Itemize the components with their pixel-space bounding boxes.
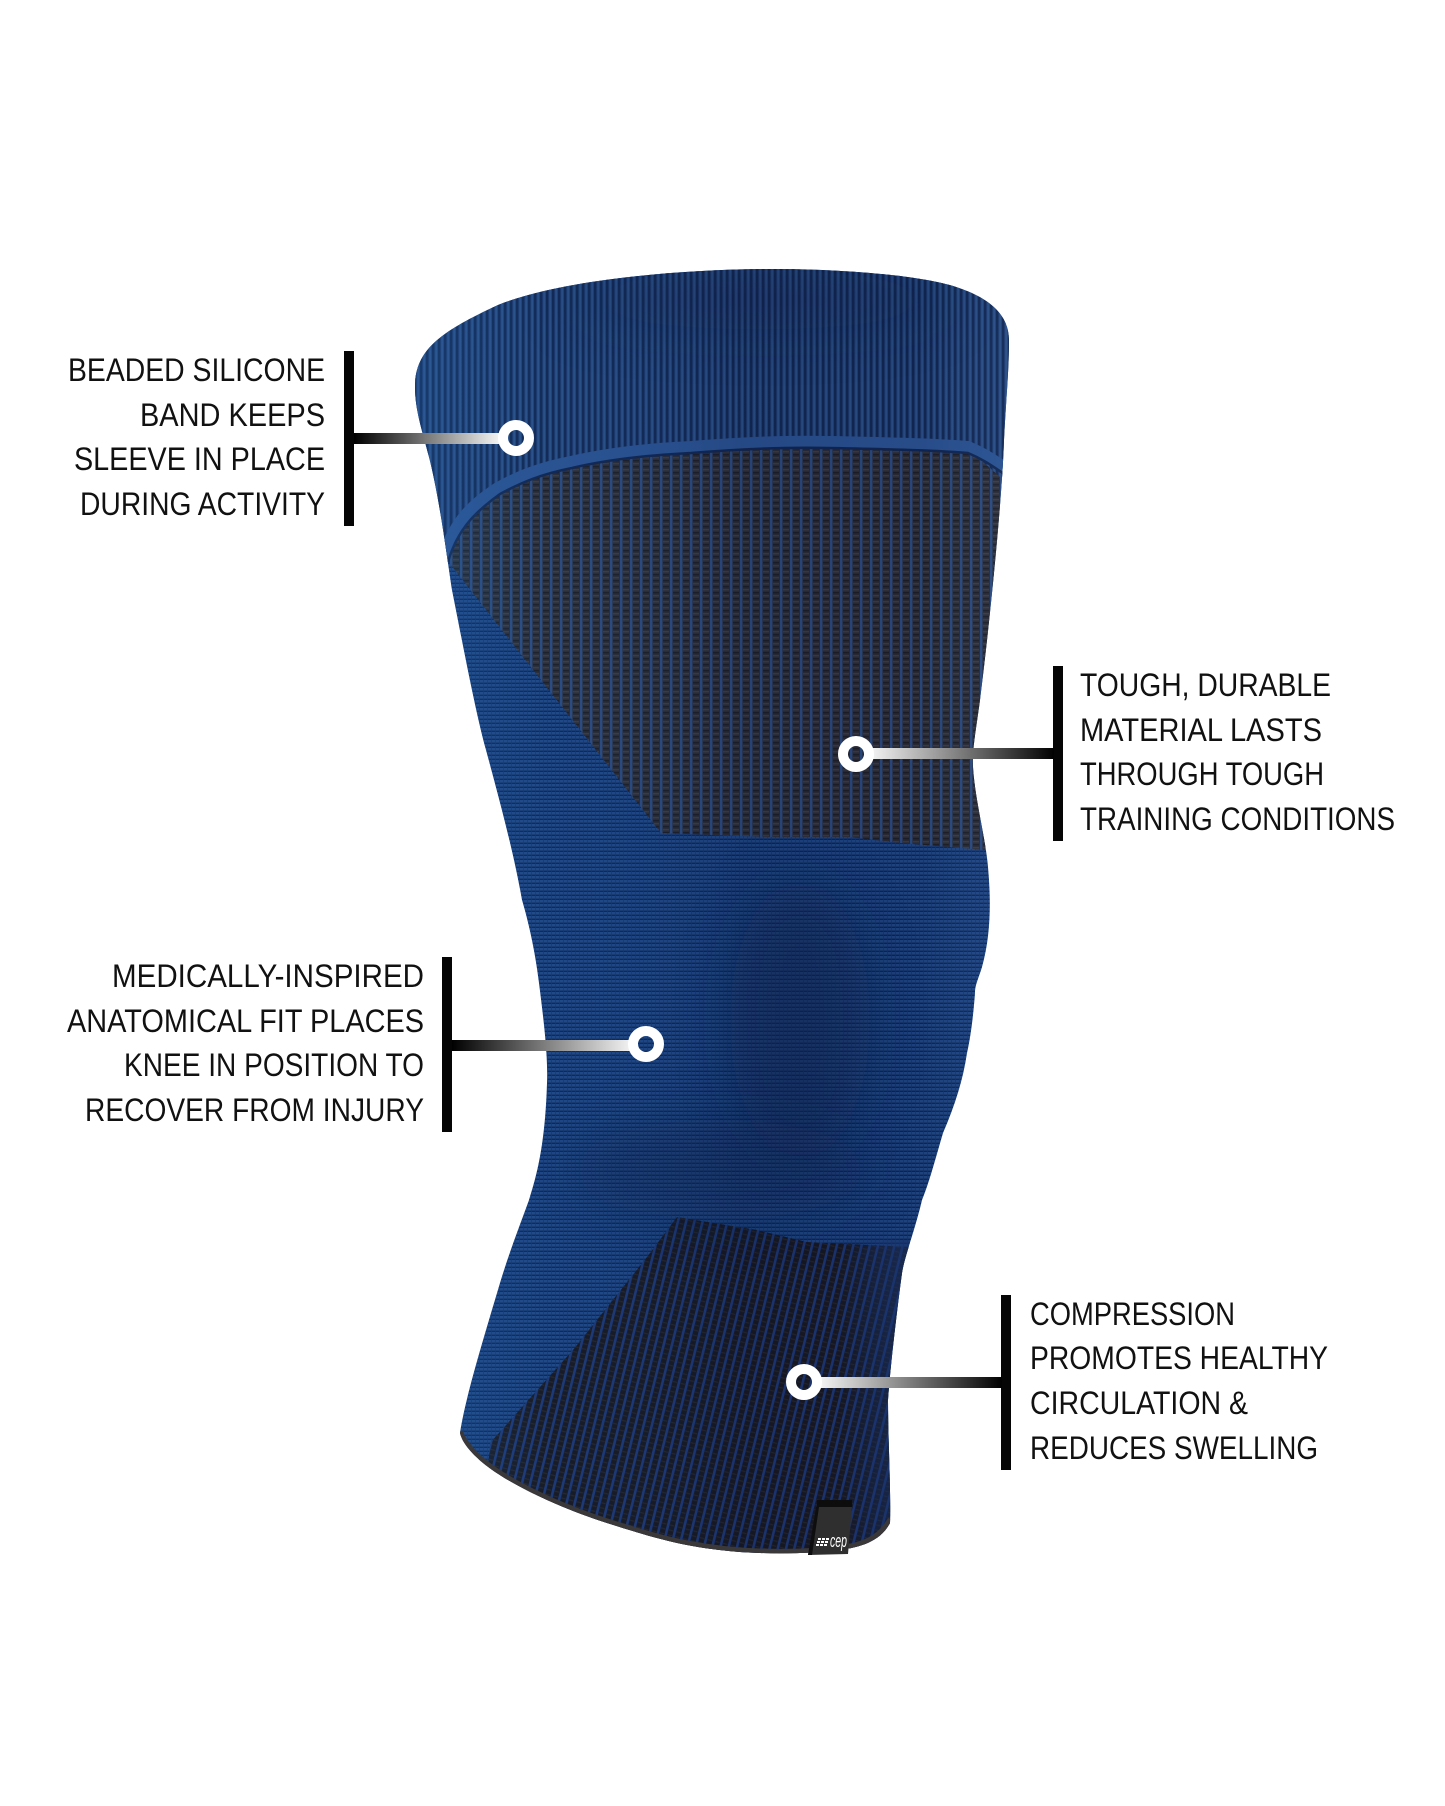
callout 2 text: THROUGH TOUGH xyxy=(1080,756,1324,792)
callout 3 text: KNEE IN POSITION TO xyxy=(124,1047,424,1083)
callout 2 text: MATERIAL LASTS xyxy=(1080,712,1322,748)
callout 3 text: ANATOMICAL FIT PLACES xyxy=(67,1003,424,1039)
upper dark thigh panel xyxy=(447,448,1010,850)
callout 3 text: MEDICALLY-INSPIRED xyxy=(112,958,424,994)
bottom hem trim xyxy=(458,1432,892,1553)
callout 1 marker xyxy=(503,425,529,451)
band top shadow xyxy=(560,270,960,330)
callout 1: silicone band xyxy=(68,351,529,526)
callout 4 text: CIRCULATION & xyxy=(1030,1385,1248,1421)
callout 3 connector xyxy=(452,1040,634,1051)
callout 4 marker xyxy=(791,1369,817,1395)
seam shadow line xyxy=(448,448,1010,562)
callout 2 bar xyxy=(1053,666,1063,841)
callout 2 text xyxy=(1080,667,1395,837)
callout 3 marker xyxy=(633,1031,659,1057)
callout 4 text: PROMOTES HEALTHY xyxy=(1030,1340,1328,1376)
callout 2 connector xyxy=(870,748,1054,759)
right-side blue fade of calf panel xyxy=(852,1240,910,1542)
callout 3: anatomical fit xyxy=(67,957,659,1132)
callout 1 text: BAND KEEPS xyxy=(140,397,325,433)
knee sleeve product xyxy=(400,260,1020,1560)
callout 1 text: SLEEVE IN PLACE xyxy=(74,441,325,477)
logo text: cep xyxy=(830,1531,847,1551)
infographic: knee sleeve with four callouts xyxy=(67,269,1394,1555)
callout 1 bar xyxy=(344,351,354,526)
callout 3 bar xyxy=(442,957,452,1132)
logo mark xyxy=(816,1538,829,1546)
callout 1 connector xyxy=(354,433,500,444)
calf shadow xyxy=(570,1120,870,1220)
callout 2 text: TRAINING CONDITIONS xyxy=(1080,801,1395,837)
callout 4: compression xyxy=(791,1295,1328,1470)
callout 1 text: BEADED SILICONE xyxy=(68,352,325,388)
brand tag xyxy=(808,1500,852,1555)
lower dark calf panel xyxy=(480,1217,910,1560)
callout 1 text: DURING ACTIVITY xyxy=(80,486,325,522)
fabric shading xyxy=(400,260,1020,1560)
band seam xyxy=(444,442,1012,556)
callout 4 bar xyxy=(1001,1295,1011,1470)
callout 2 text: TOUGH, DURABLE xyxy=(1080,667,1331,703)
callout 3 text xyxy=(67,958,424,1128)
callout 4 text xyxy=(1030,1296,1328,1466)
callout 4 text: COMPRESSION xyxy=(1030,1296,1235,1332)
callout 1 text xyxy=(68,352,325,522)
knee cap shadow xyxy=(730,880,870,1160)
callout 3 text: RECOVER FROM INJURY xyxy=(85,1092,424,1128)
beaded silicone band xyxy=(400,260,1020,565)
callout 2: durable material xyxy=(843,666,1395,841)
blue knit body xyxy=(400,260,1020,1560)
callout 2 marker xyxy=(843,741,869,767)
callout 4 text: REDUCES SWELLING xyxy=(1030,1430,1318,1466)
callout 4 connector xyxy=(818,1377,1002,1388)
